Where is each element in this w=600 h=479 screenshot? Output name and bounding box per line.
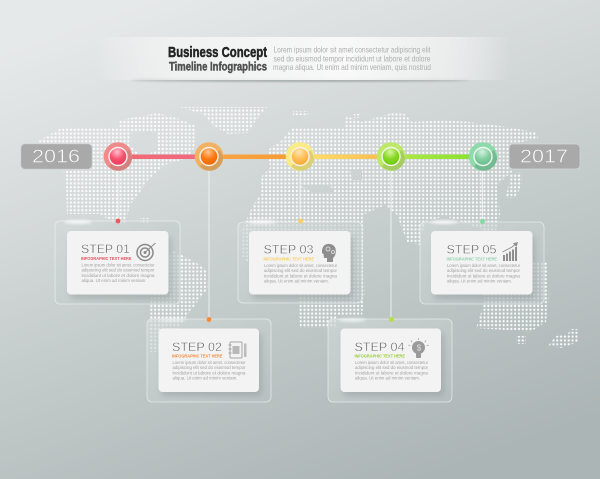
connector dot	[298, 219, 303, 223]
subheading: INFOGRAPHIC TEXT HERE	[81, 256, 132, 261]
year tag 2016	[21, 144, 92, 169]
body text: aliqua. Ut enim ad minim veniam.	[264, 278, 329, 284]
subheading: INFOGRAPHIC TEXT HERE	[172, 354, 222, 358]
header band	[95, 37, 510, 82]
body text: Lorem ipsum dolor sit amet, consectetur	[264, 263, 337, 269]
icon: head with gears	[322, 244, 336, 262]
panel: step 02	[147, 317, 271, 402]
body text: Lorem ipsum dolor sit amet, consectetur	[355, 360, 428, 366]
panel: step 05	[420, 219, 544, 304]
year tag 2017: 2017	[520, 146, 568, 166]
icon: light bulb: $	[417, 344, 422, 352]
body text: incididunt ut labore et dolore magna	[355, 370, 428, 376]
step label: STEP 01	[81, 244, 130, 256]
step label: STEP 04	[354, 342, 405, 354]
subheading: INFOGRAPHIC TEXT HERE	[264, 256, 314, 262]
node 2	[195, 142, 223, 171]
body text: Lorem ipsum dolor sit amet, consectetur	[447, 263, 520, 269]
body text: adipiscing elit sed do eiusmod tempor	[355, 365, 428, 371]
connector dot	[480, 219, 485, 224]
timeline bar	[118, 154, 483, 159]
body text	[172, 360, 246, 382]
connector dot	[207, 317, 211, 322]
step label: STEP 03	[264, 244, 314, 256]
dotted world map	[39, 107, 578, 352]
step label: STEP 02	[172, 342, 222, 354]
body text: aliqua. Ut enim ad minim veniam.	[82, 278, 146, 284]
body text	[264, 263, 337, 284]
year tag 2017	[509, 144, 580, 169]
header paragraph: sed do eiusmod tempor incididunt ut labore et dolore	[274, 54, 431, 64]
connector dot	[116, 219, 120, 223]
icon: growth chart	[502, 242, 518, 261]
header paragraph	[273, 46, 431, 72]
connector dot	[389, 317, 394, 322]
body text: incididunt ut labore et dolore magna	[264, 273, 337, 279]
icon: target	[137, 243, 156, 260]
panel: step 01	[55, 219, 180, 304]
header paragraph: magna aliqua. Ut enim ad minim veniam, quis nostrud	[273, 63, 431, 72]
panel: step 04	[328, 317, 452, 402]
body text: Lorem ipsum dolor sit amet, consectetur	[172, 360, 246, 366]
body text: adipiscing elit sed do eiusmod tempor	[82, 268, 155, 274]
body text: adipiscing elit sed do eiusmod tempor	[264, 268, 337, 274]
icon: notebook	[228, 342, 246, 358]
body text: adipiscing elit sed do eiusmod tempor	[172, 365, 246, 371]
node 1	[104, 142, 132, 171]
title: timeline infographics: Timeline Infographics	[169, 60, 267, 74]
subheading: INFOGRAPHIC TEXT HERE	[354, 354, 405, 358]
title: business concept: Business Concept	[168, 44, 267, 61]
body text	[82, 262, 155, 284]
step label: STEP 05	[446, 244, 496, 256]
connector lines	[118, 165, 482, 319]
year tag 2016: 2016	[32, 146, 80, 166]
body text: aliqua. Ut enim ad minim veniam.	[172, 376, 238, 382]
body text: incididunt ut labore et dolore magna	[447, 273, 520, 279]
body text: incididunt ut labore et dolore magna	[82, 273, 155, 279]
body text: adipiscing elit sed do eiusmod tempor	[447, 268, 520, 274]
node 3	[286, 142, 314, 171]
node 5	[469, 142, 497, 171]
body text: incididunt ut labore et dolore magna	[172, 370, 246, 376]
node 4	[377, 142, 405, 171]
body text: aliqua. Ut enim ad minim veniam.	[447, 278, 512, 284]
body text	[447, 263, 520, 284]
body text	[355, 360, 428, 382]
subheading: INFOGRAPHIC TEXT HERE	[446, 256, 497, 262]
body text: aliqua. Ut enim ad minim veniam.	[355, 376, 420, 382]
panel: step 03	[238, 219, 362, 303]
body text: Lorem ipsum dolor sit amet, consectetur	[82, 262, 155, 268]
header paragraph: Lorem ipsum dolor sit amet consectetur adipiscing elit	[274, 46, 431, 54]
